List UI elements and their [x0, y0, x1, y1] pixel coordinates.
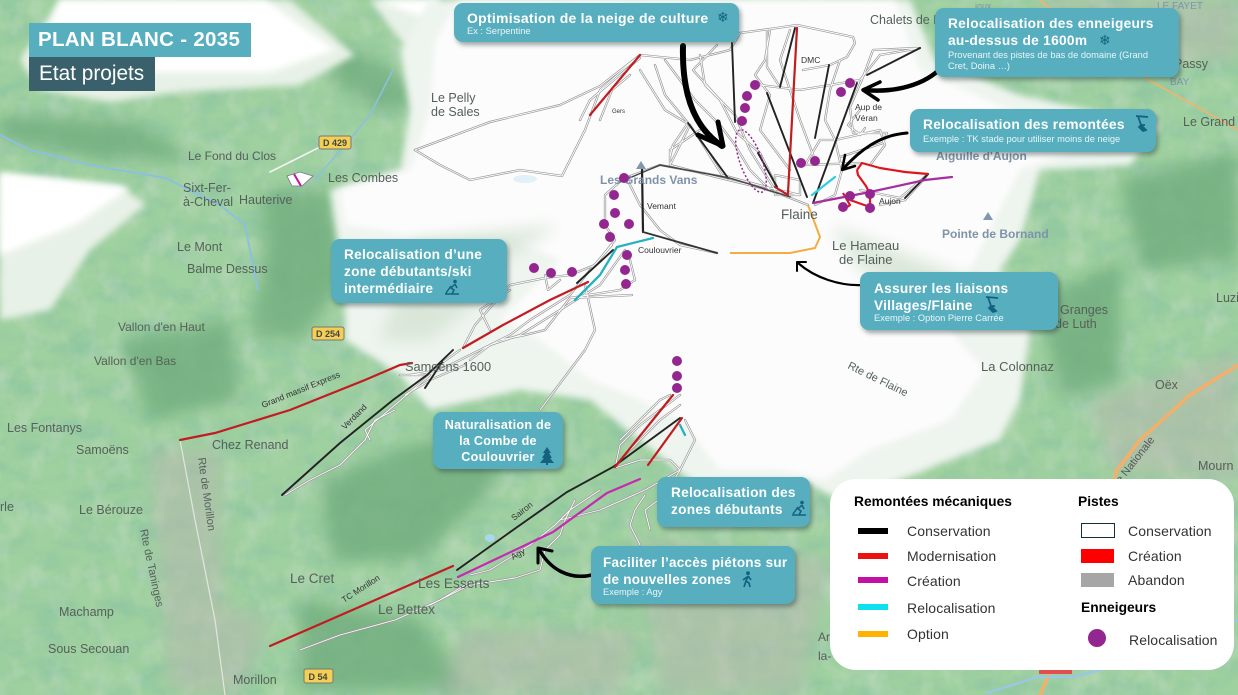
map place labels: Le Fond du Clos — [188, 149, 276, 163]
lift names: Aup de — [855, 102, 882, 112]
map place labels: Rte de Taninges — [137, 528, 165, 609]
legend heading: enneigeurs: Enneigeurs — [1081, 600, 1156, 615]
callout: zones debutants — [657, 477, 810, 527]
map place labels: Machamp — [59, 605, 114, 619]
legend item: piste abandon: Abandon — [1128, 572, 1185, 588]
lift names: TC Morillon — [340, 572, 382, 605]
legend item: creation: Création — [907, 573, 961, 589]
lift names: Vemant — [647, 201, 676, 211]
road badges: D 254 — [316, 329, 340, 339]
map place labels: de Flaine — [839, 252, 892, 267]
pistes: creation — [843, 163, 928, 210]
callout: liaisons: Assurer les liaisons — [874, 281, 1008, 296]
lifts: modernisation — [180, 28, 797, 646]
map place labels: Pointe de Bornand — [942, 227, 1049, 241]
callout: zone debutants ski intermediaire: Relocalisation d’une — [344, 247, 482, 262]
map place labels: Le Bettex — [378, 602, 435, 617]
icon: tree — [540, 447, 554, 465]
map place labels: BAY — [1170, 77, 1190, 88]
legend item: piste creation — [1081, 548, 1182, 564]
callout: naturalisation — [433, 412, 563, 469]
callout: neige de culture: Optimisation de la neige de culture — [467, 10, 708, 26]
map place labels: Samoëns 1600 — [405, 359, 491, 374]
subtitle: Etat projets — [39, 62, 144, 85]
map place labels: Morillon — [233, 673, 277, 687]
callout: neige de culture: Ex : Serpentine — [467, 26, 531, 36]
legend item: modernisation — [858, 548, 996, 564]
map place labels: Hauterive — [239, 193, 293, 207]
legend item: enneigeur relocalisation: Relocalisation — [1129, 632, 1218, 648]
lift names: Véran — [855, 113, 878, 123]
callout: liaisons: Villages/Flaine — [874, 298, 973, 313]
map place labels: Flaine — [781, 207, 818, 222]
legend item: enneigeur relocalisation — [1088, 629, 1218, 648]
legend item: piste creation: Création — [1128, 548, 1182, 564]
map place labels: Les Combes — [328, 171, 398, 185]
map place labels: Ar — [818, 630, 830, 644]
legend item: option — [858, 626, 949, 642]
map place labels: Le Cret — [290, 571, 335, 586]
legend item: relocalisation — [858, 600, 996, 616]
map place labels: à-Cheval — [183, 195, 233, 209]
legend panel — [830, 479, 1234, 670]
icon: skier — [445, 280, 459, 295]
map place labels: de Sales — [431, 105, 480, 119]
callout: remontees: Relocalisation des remontées — [923, 117, 1125, 132]
map place labels: Les Fontanys — [7, 421, 82, 435]
lifts: relocalisation — [575, 177, 835, 435]
lift names: Grand massif Express — [260, 369, 341, 410]
callout: acces pietons — [591, 546, 795, 604]
map place labels: Les Grands Vans — [600, 173, 698, 187]
road badges — [304, 136, 1072, 683]
callout: enneigeurs: Provenant des pistes de bas de domaine (Grand — [948, 50, 1148, 60]
icon: skier — [792, 500, 806, 516]
callout: zones debutants: Relocalisation des — [671, 485, 796, 500]
callout: liaisons — [860, 272, 1058, 330]
legend item: option: Option — [907, 626, 949, 642]
map place labels: Aiguille d'Aujon — [936, 149, 1027, 163]
callout: enneigeurs: Relocalisation des enneigeurs — [948, 16, 1154, 31]
map place labels: Le Hameau — [832, 238, 899, 253]
lifts: creation — [458, 177, 952, 577]
map place labels: Oëx — [1155, 378, 1179, 392]
callout: enneigeurs: Cret, Doina …) — [948, 61, 1010, 71]
legend item: creation — [858, 573, 961, 589]
legend heading: pistes: Pistes — [1078, 494, 1119, 509]
arrow: neige de culture — [683, 46, 723, 146]
legend item: conservation: Conservation — [907, 523, 991, 539]
lift names: Coulouvrier — [638, 245, 682, 255]
callout: enneigeurs: au-dessus de 1600m — [948, 33, 1087, 48]
map place labels: Rue Nationale — [1105, 435, 1157, 497]
callout: remontees: Exemple : TK stade pour utiliser moins de neige — [923, 134, 1120, 144]
road badges: D 54 — [308, 672, 328, 682]
map place labels: Granges — [1060, 303, 1108, 317]
map place labels: Chez Renand — [212, 438, 288, 452]
callout: naturalisation: la Combe de — [459, 434, 537, 448]
arrow: enneigeurs — [863, 67, 942, 100]
callout: acces pietons: Exemple : Agy — [603, 587, 662, 597]
arrow: acces pietons — [538, 548, 592, 576]
lift names: Aujon — [879, 196, 901, 206]
map place labels: Samoëns — [76, 443, 129, 457]
map place labels: Mourn — [1198, 459, 1233, 473]
title: PLAN BLANC - 2035 — [38, 28, 240, 51]
icon: snowflake: ❄ — [717, 10, 729, 26]
map place labels: Sous Secouan — [48, 642, 129, 656]
map place labels: Sixt-Fer- — [183, 181, 231, 195]
map place labels: Vallon d'en Bas — [94, 354, 176, 368]
callout: zones debutants: zones débutants — [671, 502, 783, 517]
lift names: Gers — [612, 109, 625, 115]
lift names — [260, 55, 901, 605]
map place labels: Chalets de Pl — [870, 13, 944, 27]
callout: zone debutants ski intermediaire: zone débutants/ski — [344, 264, 472, 279]
map place labels: Rte de Flaine — [846, 360, 910, 399]
lift names: DMC — [801, 55, 820, 65]
callout: naturalisation: Naturalisation de — [445, 418, 551, 432]
icon: ski lift — [986, 296, 998, 313]
callout: enneigeurs — [935, 8, 1179, 77]
callout: zone debutants ski intermediaire: intermédiaire — [344, 281, 433, 296]
icon: walker — [742, 571, 752, 588]
road badges: D 429 — [323, 138, 347, 148]
callout: remontees — [910, 109, 1156, 152]
map place labels: ioux — [975, 1, 992, 11]
map place labels: La Colonnaz — [981, 359, 1054, 374]
ski runs network — [285, 25, 928, 650]
callout: liaisons: Exemple : Option Pierre Carrée — [874, 313, 1004, 323]
callout: naturalisation: Coulouvrier — [461, 450, 535, 464]
callout: neige de culture — [454, 3, 739, 42]
lifts: option — [730, 205, 820, 253]
small Hauterive zone — [287, 172, 313, 186]
map place labels: de Luth — [1055, 317, 1097, 331]
map place labels: LE FAYET — [1157, 1, 1203, 12]
map place labels: Le Bérouze — [79, 503, 143, 517]
map place labels: Rte de Morillon — [195, 457, 217, 532]
map place labels: la- — [818, 649, 831, 663]
lift names: Agy — [509, 545, 527, 562]
lift names: Verdand — [339, 402, 369, 431]
title — [29, 23, 251, 57]
arrow: liaisons — [797, 262, 862, 285]
map place labels: Les Esserts — [418, 576, 490, 591]
map place labels: Balme Dessus — [187, 262, 268, 276]
map place labels: Passy — [1174, 57, 1209, 71]
icon: ski lift — [1136, 115, 1148, 132]
legend item: relocalisation: Relocalisation — [907, 600, 996, 616]
map place labels: Le Mont — [177, 240, 223, 254]
arrow: remontees — [842, 133, 907, 170]
lift names: Sairon — [509, 499, 535, 523]
lifts: conservation — [282, 28, 928, 570]
legend heading: remontees: Remontées mécaniques — [854, 494, 1012, 509]
map place labels: Le Pelly — [431, 91, 476, 105]
callout: zone debutants ski intermediaire — [331, 239, 507, 303]
legend item: piste conservation — [1081, 523, 1212, 539]
legend item: conservation — [858, 523, 991, 539]
map place labels: rle — [0, 500, 14, 514]
legend item: modernisation: Modernisation — [907, 548, 996, 564]
icon: snowflake: ❄ — [1099, 33, 1111, 49]
callout: acces pietons: Faciliter l’accès piétons sur — [603, 555, 787, 570]
dashed zone to naturalise — [729, 126, 773, 196]
subtitle — [29, 57, 155, 91]
snowmaking relocation dots — [529, 78, 875, 393]
map place labels: Vallon d'en Haut — [118, 320, 205, 334]
legend item: piste abandon — [1081, 572, 1185, 588]
legend item: piste conservation: Conservation — [1128, 523, 1212, 539]
callout: acces pietons: de nouvelles zones — [603, 572, 731, 587]
